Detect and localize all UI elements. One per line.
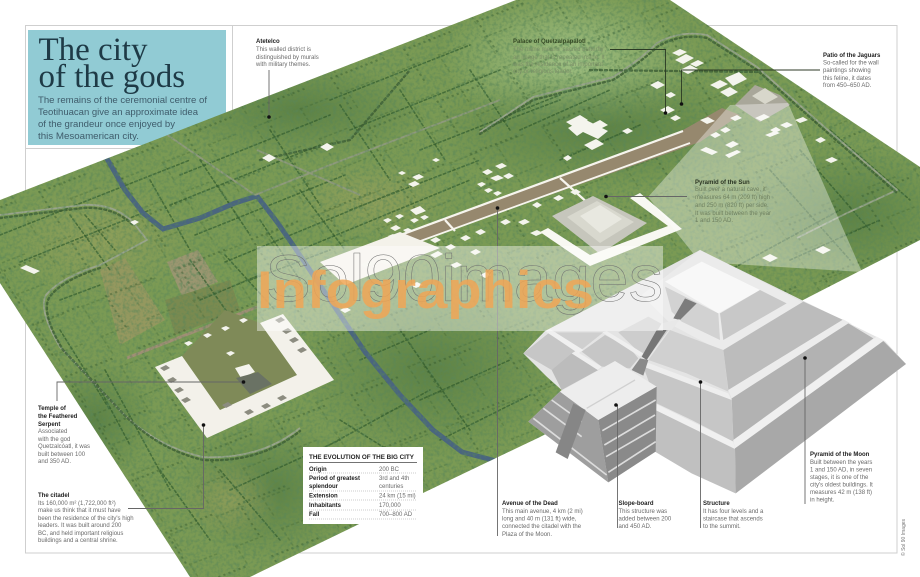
intro text: Teotihuacan give an approximate idea [38,106,199,117]
table: the evolution of the big city: Period of greatest [309,476,360,482]
annotation: Pyramid of the Sun [604,180,771,224]
table: the evolution of the big city: Origin [309,467,327,473]
annotation: Structure: staircase that ascends [703,516,763,522]
table: the evolution of the big city: Fall [309,512,320,518]
slope-board platform [528,361,657,482]
annotation: Avenue of the Dead: connected the citadel with the [502,524,582,530]
annotation: Temple of the Feathered Serpent: with the god [37,437,70,443]
annotation: Patio of the Jaguars: So-called for the wall [823,60,879,66]
annotation: Palace of Quetzalpapalotl [512,39,667,115]
watermark: Sol90images [265,241,663,315]
house markers on citadel [160,317,307,415]
annotation: Patio of the Jaguars: paintings showing [823,68,871,74]
image credit: © Sol 90 Images [900,518,907,556]
annotation: Temple of the Feathered Serpent [37,380,245,465]
table: the evolution of the big city: 700–800 AD [379,512,413,518]
annotation: Slope-board: and 450 AD. [618,524,652,530]
roads [0,34,897,460]
small buildings [20,49,831,313]
pyramid-side plaza buildings [700,85,838,163]
intro text: The remains of the ceremonial centre of [38,94,207,105]
table: the evolution of the big city: centuries [379,484,403,490]
annotation: Pyramid of the Moon: Pyramid of the Moon [810,452,870,458]
annotation: The citadel [38,423,205,544]
intro text [38,94,207,141]
table: the evolution of the big city: 170,000 [379,503,401,509]
table: the evolution of the big city [303,447,423,524]
table: the evolution of the big city: THE EVOLUTION OF THE BIG CITY [309,454,415,461]
annotation: Pyramid of the Sun: Pyramid of the Sun [695,180,750,186]
annotation: Structure: It has four levels and a [703,509,764,515]
annotation: Structure: to the summit. [703,524,741,530]
annotation: Temple of the Feathered Serpent: the Feathered [38,414,78,420]
table: the evolution of the big city: splendour [309,484,339,490]
annotation: Pyramid of the Moon: city's oldest buildings. It [810,482,873,488]
annotation: Avenue of the Dead: This main avenue, 4 km (2 mi) [502,509,583,515]
annotation: Patio of the Jaguars: Patio of the Jaguars [823,53,881,59]
annotation: Avenue of the Dead: long and 40 m (131 ft) wide, [502,516,577,522]
annotation: Patio of the Jaguars: this feline, it dates [823,76,871,82]
annotation: Atetelco: with military themes. [255,62,311,68]
annotation: Pyramid of the Sun: and 250 m (820 ft) per side. [695,203,769,209]
annotation: Temple of the Feathered Serpent: Associated [38,429,67,435]
annotation: Palace of Quetzalpapalotl: city or religious leader. [513,69,573,75]
annotation: Pyramid of the Moon: measures 42 m (138 ft) [810,490,872,496]
table: the evolution of the big city: Inhabitants [309,503,342,509]
interior blocks [184,318,248,356]
annotation: Avenue of the Dead: Plaza of the Moon. [502,532,552,538]
intro text: this Mesoamerican city. [38,130,139,141]
annotation: The citadel: been the residence of the city's high [38,516,134,522]
title: The city [38,32,148,68]
table: the evolution of the big city: 3rd and 4th [379,476,409,482]
title panel [28,30,226,145]
annotation: Atetelco [255,39,319,119]
annotation: Pyramid of the Moon: 1 and 150 AD, in seven [810,468,872,474]
annotation: The citadel: Its 160,000 m² (1,722,000 ft²) [38,501,116,507]
annotation: Structure [699,380,764,530]
Citadel [155,310,334,438]
annotation: Pyramid of the Sun: 1 and 150 AD. [695,218,733,224]
watermark: Infographics [257,261,594,320]
table: the evolution of the big city: Extension [309,494,338,500]
annotation: Atetelco: distinguished by murals [256,55,319,61]
intro text: of the grandeur once enjoyed by [38,118,175,129]
annotation: Palace of Quetzalpapalotl: was the residence of an important [512,62,603,68]
annotation: Pyramid of the Moon: in height. [810,498,835,504]
annotation: Temple of the Feathered Serpent: Temple of [38,406,67,412]
lower terraces [523,317,906,493]
Pyramid of the Moon [523,250,906,493]
annotation: Slope-board: added between 200 [618,516,672,522]
title: of the gods [38,59,185,95]
annotation: Slope-board [614,403,672,530]
annotation: Patio of the Jaguars: from 450–650 AD. [823,83,872,89]
annotation: Slope-board: Slope-board [618,501,654,507]
annotation: Structure: Structure [703,501,730,507]
main staircase [632,298,697,376]
annotation: Avenue of the Dead: Avenue of the Dead [502,501,558,507]
annotation: Pyramid of the Moon: Built between the years [810,460,872,466]
Pyramid of the Sun [540,193,682,266]
annotation: Patio of the Jaguars [680,53,881,106]
table: the evolution of the big city: 24 km (15 mi) [379,494,416,500]
annotation: Avenue of the Dead [496,206,583,538]
table: the evolution of the big city: 200 BC [379,467,400,473]
annotation: Pyramid of the Sun: measures 64 m (209 ft) high [695,195,770,201]
annotation: The citadel: make us think that it must have [38,508,121,514]
annotation: Temple of the Feathered Serpent: built between 100 [38,452,86,458]
annotation: Slope-board: This structure was [618,509,667,515]
annotation: Temple of the Feathered Serpent: and 350 AD. [38,459,71,465]
annotation: The citadel: leaders. It was built around 200 [38,523,122,529]
annotation: The citadel: buildings and a central shrine. [38,538,118,544]
annotation: Pyramid of the Moon [803,356,873,504]
annotation: Palace of Quetzalpapalotl: The name means 'sacred butterfly', [513,47,607,53]
annotation: Temple of the Feathered Serpent: Serpent [38,422,60,428]
annotation: Pyramid of the Sun: It was built between the year [695,211,771,217]
annotation: Pyramid of the Sun: Built over a natural cave, it [695,187,766,193]
annotation: Atetelco: Atetelco [256,39,280,45]
Avenue of the Dead [320,108,740,285]
annotation: Atetelco: This walled district is [256,47,311,53]
title [38,32,185,95]
highlight cone to Pyramid of the Moon [648,103,862,272]
upper terraces [642,250,873,442]
annotation: Pyramid of the Moon: stages, it is one of the [810,475,869,481]
annotation: The citadel: The citadel [38,493,70,499]
river [106,157,500,462]
annotation: Palace of Quetzalpapalotl: an image that is repeated inside. It [513,55,605,61]
annotation: Palace of Quetzalpapalotl: Palace of Quetzalpapalotl [513,39,586,45]
annotation: Temple of the Feathered Serpent: Quetzalcóatl, it was [38,444,90,450]
annotation: The citadel: BC, and held important religious [38,531,123,537]
